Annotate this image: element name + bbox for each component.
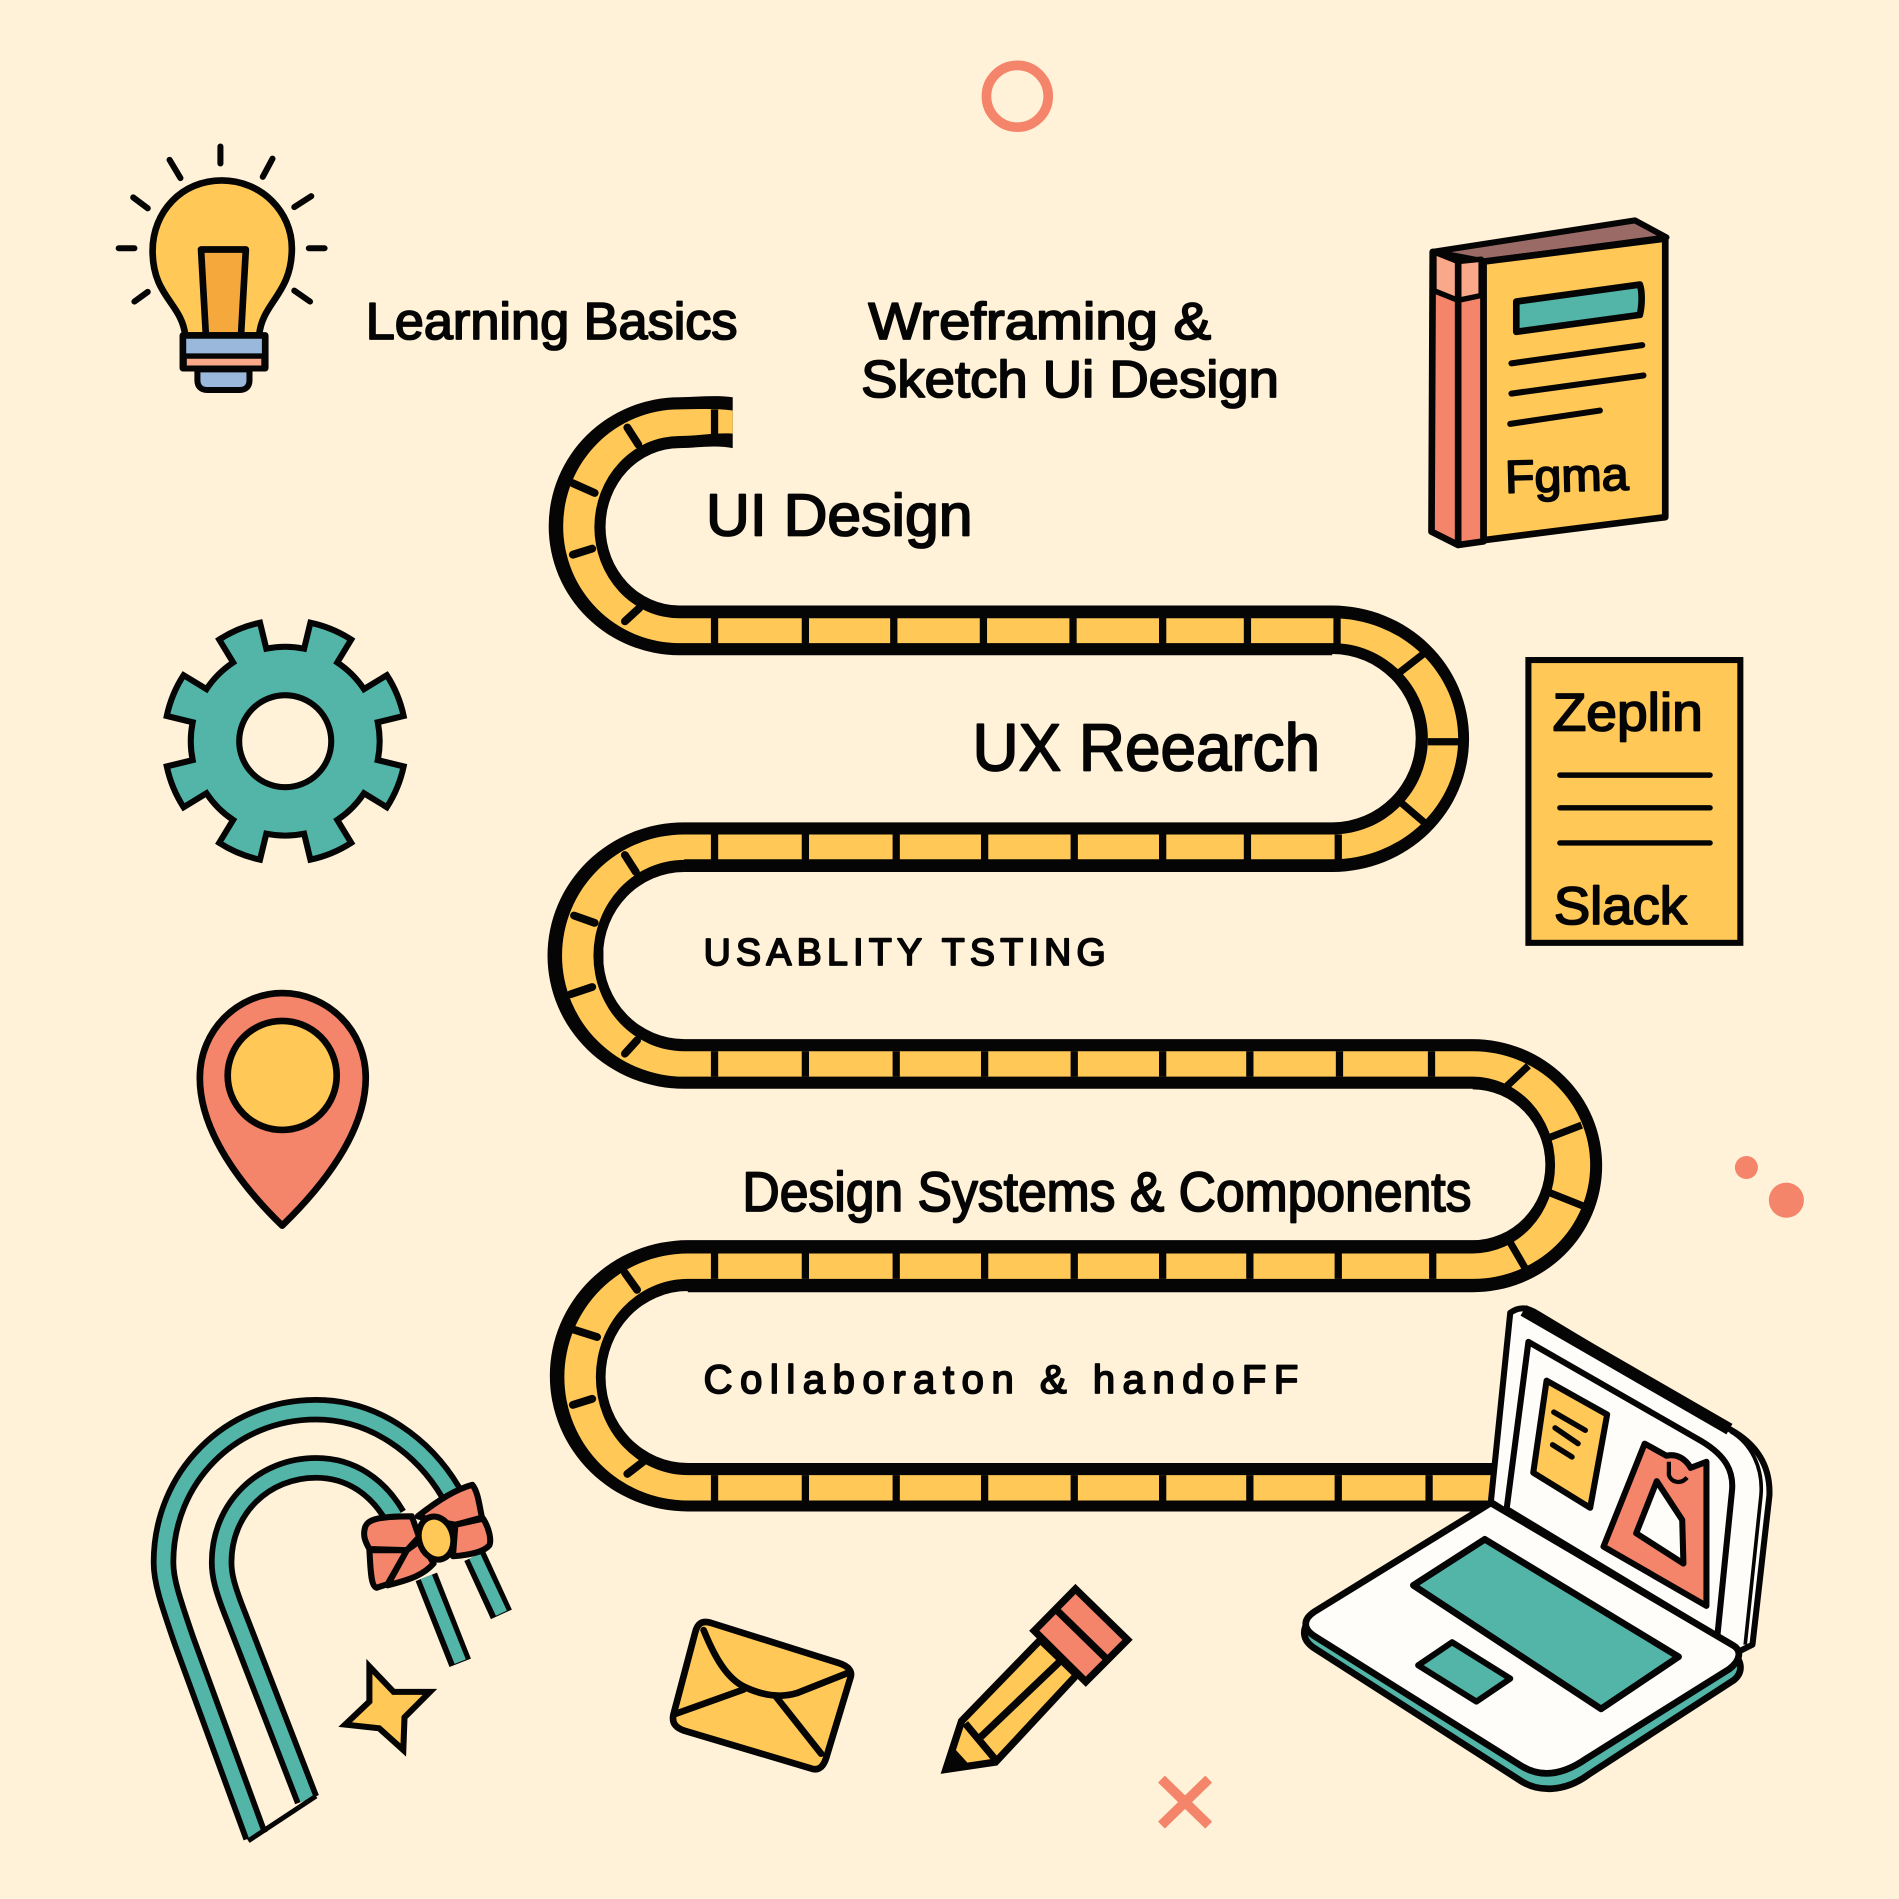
icon: bow on magnet — [364, 1485, 490, 1588]
label: Usability Testing: USABLITY TSTING — [704, 931, 1106, 973]
label: Wireframing and Sketch UI Design — [861, 293, 1279, 409]
icon: Figma book: Fgma — [1504, 448, 1630, 503]
icon: Zeplin and Slack card: Zeplin — [1553, 683, 1703, 742]
icon: Zeplin and Slack card — [1528, 660, 1740, 943]
icon: magnet — [163, 1410, 501, 1841]
icon: pencil — [946, 1589, 1128, 1769]
label: Wireframing and Sketch UI Design: Wreframing & — [868, 293, 1211, 351]
label: UX Research: UX Reearch — [973, 711, 1320, 785]
roadmap track — [548, 396, 1602, 1511]
icon: Zeplin and Slack card: Slack — [1554, 877, 1687, 936]
track outline — [548, 396, 1602, 1511]
label: Wireframing and Sketch UI Design: Sketch Ui Design — [861, 351, 1279, 409]
icon: Figma book — [1432, 220, 1666, 545]
track dividers — [715, 409, 1585, 1501]
label: Collaboration and handoff: Collaboraton & handoFF — [704, 1358, 1298, 1402]
decorative dots right — [1735, 1156, 1804, 1218]
icon: star — [345, 1666, 430, 1750]
decorative ring top — [986, 65, 1048, 127]
icon: laptop — [1304, 1308, 1769, 1789]
icon: light bulb — [119, 147, 325, 390]
label: Learning Basics: Learning Basics — [366, 293, 738, 351]
label: UI Design: UI Design — [706, 481, 973, 548]
icon: map pin — [200, 993, 366, 1226]
icon: gear — [167, 623, 404, 860]
track rounded curve marks — [570, 428, 643, 1474]
icon: envelope — [673, 1622, 851, 1769]
track yellow fill — [562, 409, 1590, 1501]
decorative x mark bottom — [1161, 1779, 1209, 1825]
label: Design Systems and Components: Design Systems & Components — [742, 1161, 1471, 1223]
